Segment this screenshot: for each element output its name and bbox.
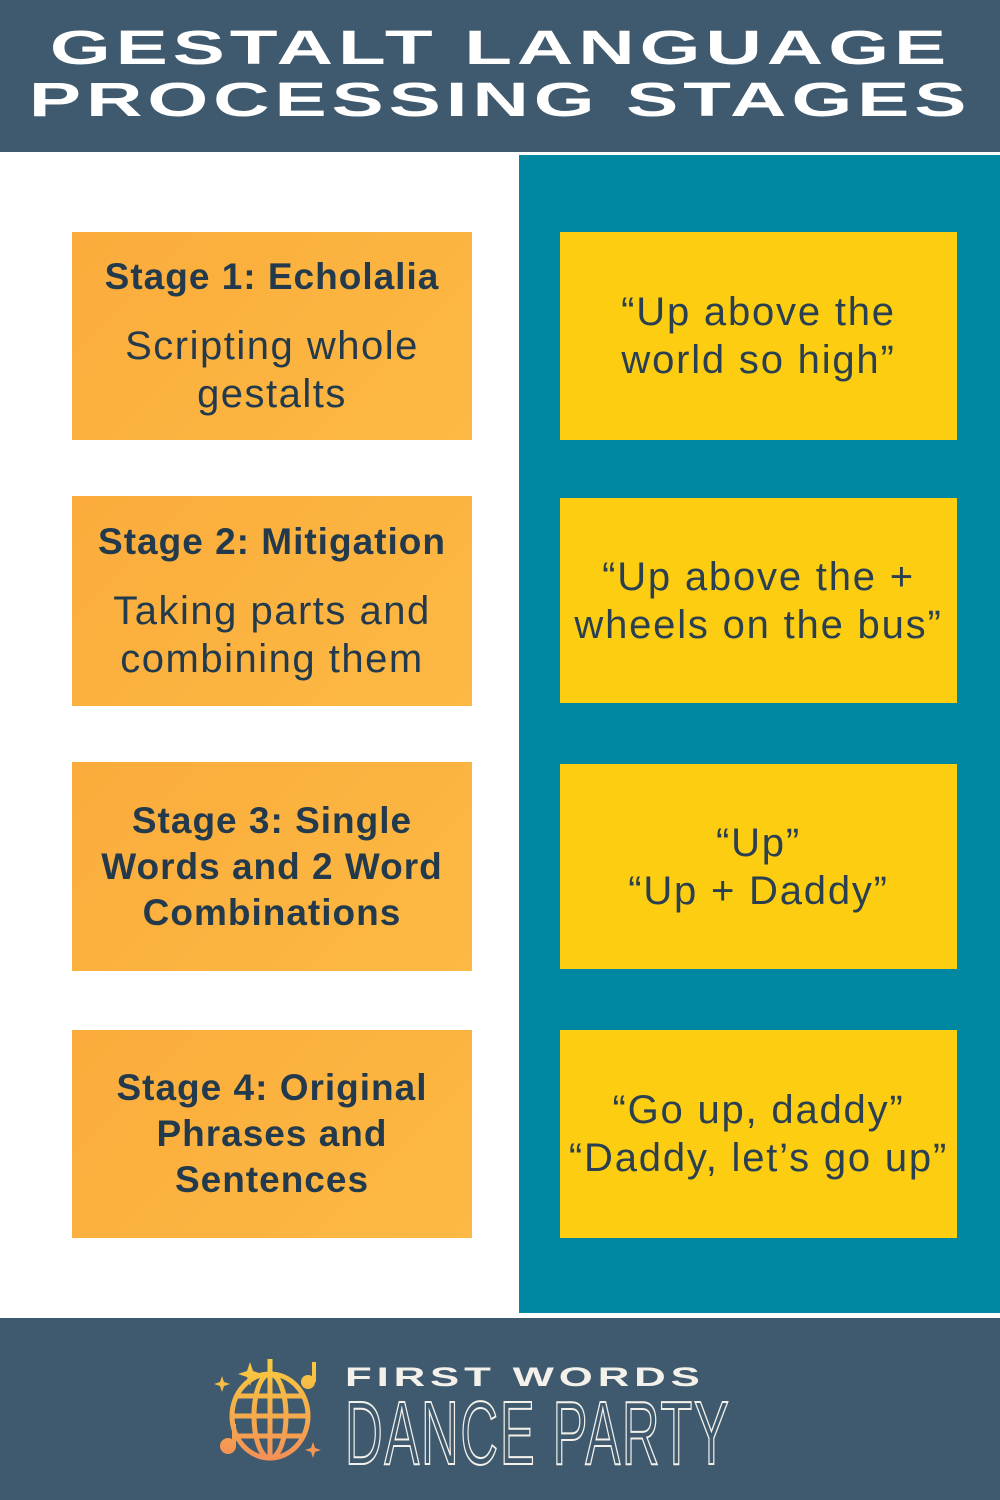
title: GESTALT LANGUAGE — [49, 22, 951, 75]
footer — [0, 1318, 1000, 1500]
title: PROCESSING STAGES — [29, 74, 971, 127]
stage 3 box: Words and 2 Word — [101, 846, 443, 886]
example 2 — [560, 498, 957, 703]
example 3 — [560, 764, 957, 969]
stage 3 box: Combinations — [143, 892, 401, 932]
example 4: “Go up, daddy” — [612, 1088, 905, 1132]
stage 4 box — [72, 1030, 472, 1238]
stage 2 box — [72, 496, 472, 706]
stage 4 box: Sentences — [175, 1159, 369, 1200]
teal panel: examples — [519, 155, 1000, 1313]
stage 2 box: Stage 2: Mitigation — [98, 521, 446, 562]
example 2: wheels on the bus” — [574, 602, 943, 646]
title — [29, 22, 971, 127]
stage 4 box: Phrases and — [156, 1113, 388, 1154]
example 2: “Up above the + — [602, 554, 915, 598]
example 4: “Daddy, let’s go up” — [569, 1136, 948, 1180]
stage 3 box: Stage 3: Single — [132, 800, 412, 840]
stage 3 box — [72, 762, 472, 971]
example 3: “Up + Daddy” — [628, 868, 889, 912]
stage 2 box: combining them — [120, 637, 424, 681]
brand name: FIRST WORDS — [345, 1362, 705, 1392]
stage 1 box — [72, 232, 472, 440]
example 1 — [560, 232, 957, 440]
stage 2 box: Taking parts and — [113, 589, 431, 633]
header — [0, 0, 1000, 152]
stage 1 box: Scripting whole — [125, 324, 419, 368]
example 4 — [560, 1030, 957, 1238]
example 3: “Up” — [716, 820, 801, 864]
stage 1 box: gestalts — [197, 372, 347, 416]
example 1: “Up above the — [621, 290, 896, 334]
stage 1 box: Stage 1: Echolalia — [105, 256, 439, 297]
brand name — [345, 1362, 729, 1466]
icon: disco ball logo — [214, 1359, 321, 1460]
stage 4 box: Stage 4: Original — [116, 1067, 428, 1108]
example 1: world so high” — [621, 338, 896, 382]
